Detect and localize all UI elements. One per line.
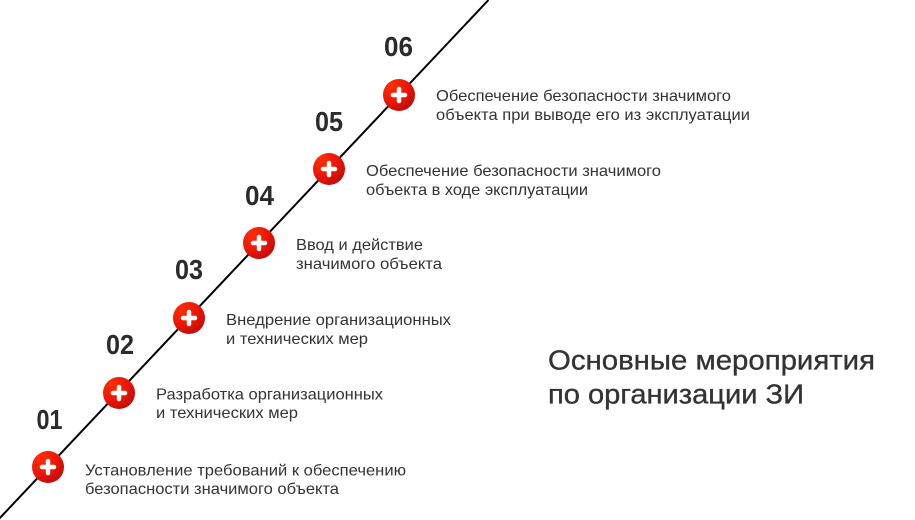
step 04: значимого объекта	[296, 256, 442, 273]
step 05	[313, 106, 661, 199]
step 03: 03	[175, 254, 203, 285]
step 06	[383, 31, 750, 124]
step 02: Разработка организационных	[156, 386, 383, 404]
step 01: 01	[36, 404, 62, 435]
step 02: 02	[106, 329, 134, 360]
timeline diagonal line	[0, 0, 488, 520]
step 04: Ввод и действие	[296, 237, 423, 254]
step 05: 05	[315, 106, 343, 137]
title: по организации ЗИ	[548, 378, 804, 410]
step 01	[32, 404, 406, 498]
step 01: безопасности значимого объекта	[85, 481, 339, 498]
step 06: Обеспечение безопасности значимого	[436, 88, 731, 105]
step 04	[243, 180, 442, 273]
step 06: объекта при выводе его из эксплуатации	[436, 107, 750, 124]
step 05: объекта в ходе эксплуатации	[366, 182, 588, 199]
step 03	[173, 254, 451, 348]
step 03: и технических мер	[226, 331, 368, 348]
title: Основные мероприятия	[548, 344, 875, 376]
step 02	[103, 329, 383, 422]
step 06: 06	[384, 31, 413, 62]
step 04: 04	[245, 180, 274, 211]
step 02: и технических мер	[156, 405, 298, 422]
step 01: Установление требований к обеспечению	[85, 462, 406, 480]
step 05: Обеспечение безопасности значимого	[366, 163, 661, 180]
step 03: Внедрение организационных	[226, 312, 451, 329]
title	[548, 344, 875, 410]
